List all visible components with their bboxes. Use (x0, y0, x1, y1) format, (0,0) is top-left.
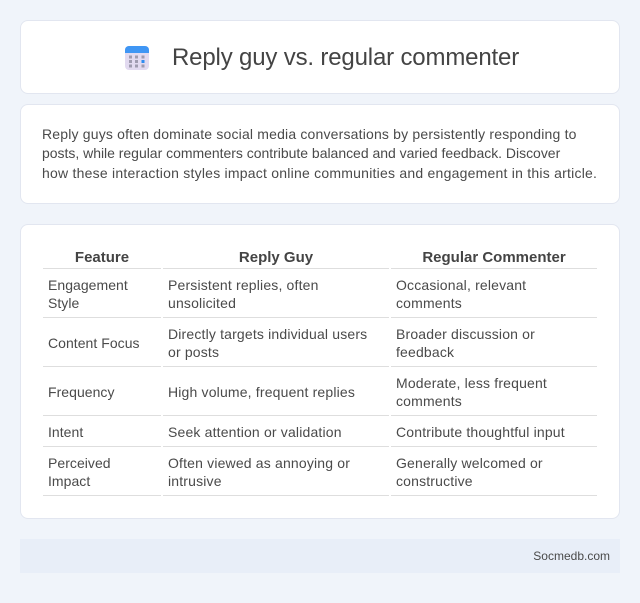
row: perceived impact: Impact (48, 473, 90, 489)
row: engagement style: Style (48, 295, 79, 311)
row: intent: Seek attention or validation (168, 424, 342, 440)
panel: introduction (20, 104, 620, 204)
row: content focus (43, 326, 597, 367)
row: perceived impact: Perceived (48, 455, 111, 471)
table header row: Regular Commenter (422, 249, 566, 266)
row: perceived impact: Often viewed as annoying or (168, 455, 350, 471)
row: content focus: Directly targets individual users (168, 326, 367, 342)
row: frequency: High volume, frequent replies (168, 384, 355, 400)
table header row: Feature (75, 249, 129, 266)
panel: comparison table (20, 224, 620, 519)
table header row: Reply Guy (239, 249, 313, 266)
row: frequency (43, 375, 597, 416)
row: perceived impact (43, 455, 597, 496)
intro text: posts, while regular commenters contribute balanced and varied feedback. Discover (42, 145, 560, 161)
row: engagement style: Occasional, relevant (396, 277, 526, 293)
row: engagement style: Engagement (48, 277, 128, 293)
row: intent: Intent (48, 424, 83, 440)
icon: calendar (125, 46, 149, 70)
title: Reply guy vs. regular commenter (172, 44, 519, 71)
panel: title card (20, 20, 620, 94)
row: perceived impact: Generally welcomed or (396, 455, 543, 471)
row: content focus: feedback (396, 344, 454, 360)
row: frequency: Moderate, less frequent (396, 375, 547, 391)
table header row (43, 249, 597, 269)
row: engagement style: comments (396, 295, 462, 311)
row: frequency: comments (396, 393, 462, 409)
row: intent: Contribute thoughtful input (396, 424, 565, 440)
row: intent (43, 424, 597, 447)
row: perceived impact: intrusive (168, 473, 222, 489)
row: perceived impact: constructive (396, 473, 473, 489)
intro text: how these interaction styles impact online communities and engagement in this article. (42, 165, 597, 181)
row: content focus: Broader discussion or (396, 326, 535, 342)
intro text (42, 126, 597, 181)
row: content focus: Content Focus (48, 335, 140, 351)
row: engagement style (43, 277, 597, 318)
row: content focus: or posts (168, 344, 219, 360)
row: frequency: Frequency (48, 384, 115, 400)
footer source text: Socmedb.com (533, 549, 610, 563)
footer bar (20, 539, 620, 573)
row: engagement style: unsolicited (168, 295, 236, 311)
intro text: Reply guys often dominate social media conversations by persistently responding to (42, 126, 577, 142)
row: engagement style: Persistent replies, often (168, 277, 319, 293)
